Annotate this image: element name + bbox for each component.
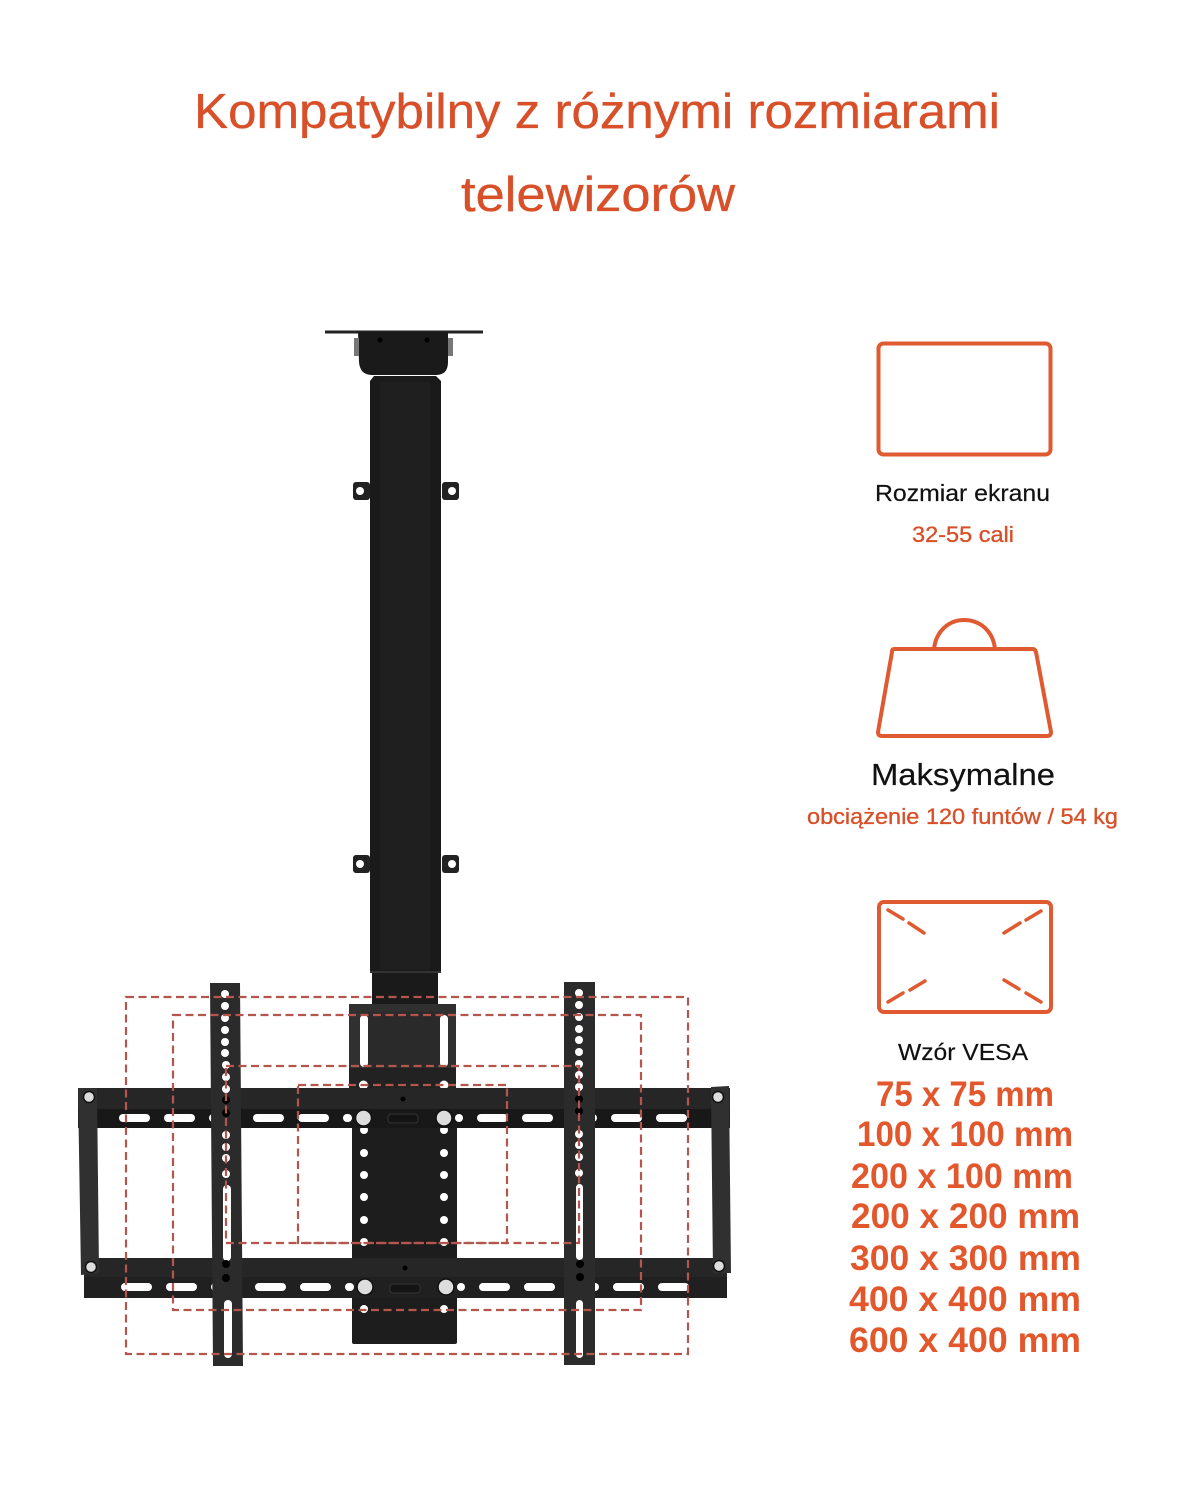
VESA label: Wzór VESA [898,1039,1029,1065]
dashed VESA outlines [126,997,688,1354]
ceiling plate and bracket [325,330,483,380]
screws [84,1092,724,1295]
VESA sizes list [849,1075,1081,1360]
title: Kompatybilny z różnymi rozmiarami [194,85,1000,139]
icon: weight [878,620,1051,736]
max load label: Maksymalne [871,757,1055,792]
title [194,85,1000,222]
horizontal frame [78,1086,731,1298]
upper bracket [349,1004,456,1090]
VESA sizes list: 600 x 400 mm [849,1321,1081,1360]
max load value: obciążenie 120 funtów / 54 kg [807,804,1118,829]
left vertical strap [210,983,243,1366]
screen size value: 32-55 cali [912,522,1014,547]
telescopic column [370,376,441,1005]
VESA sizes list: 300 x 300 mm [850,1239,1081,1278]
ceiling mount product illustration [78,330,731,1366]
VESA sizes list: 400 x 400 mm [849,1280,1081,1319]
column ears [353,482,459,873]
right vertical strap [564,982,595,1365]
screen size label: Rozmiar ekranu [875,480,1050,506]
title: telewizorów [461,168,736,222]
center plate [352,1125,457,1344]
icon: screen [878,344,1050,454]
icon: VESA pattern [879,902,1051,1012]
VESA sizes list: 200 x 200 mm [851,1197,1080,1236]
VESA sizes list: 75 x 75 mm [876,1075,1054,1114]
VESA sizes list: 200 x 100 mm [851,1157,1073,1196]
VESA sizes list: 100 x 100 mm [857,1115,1073,1154]
